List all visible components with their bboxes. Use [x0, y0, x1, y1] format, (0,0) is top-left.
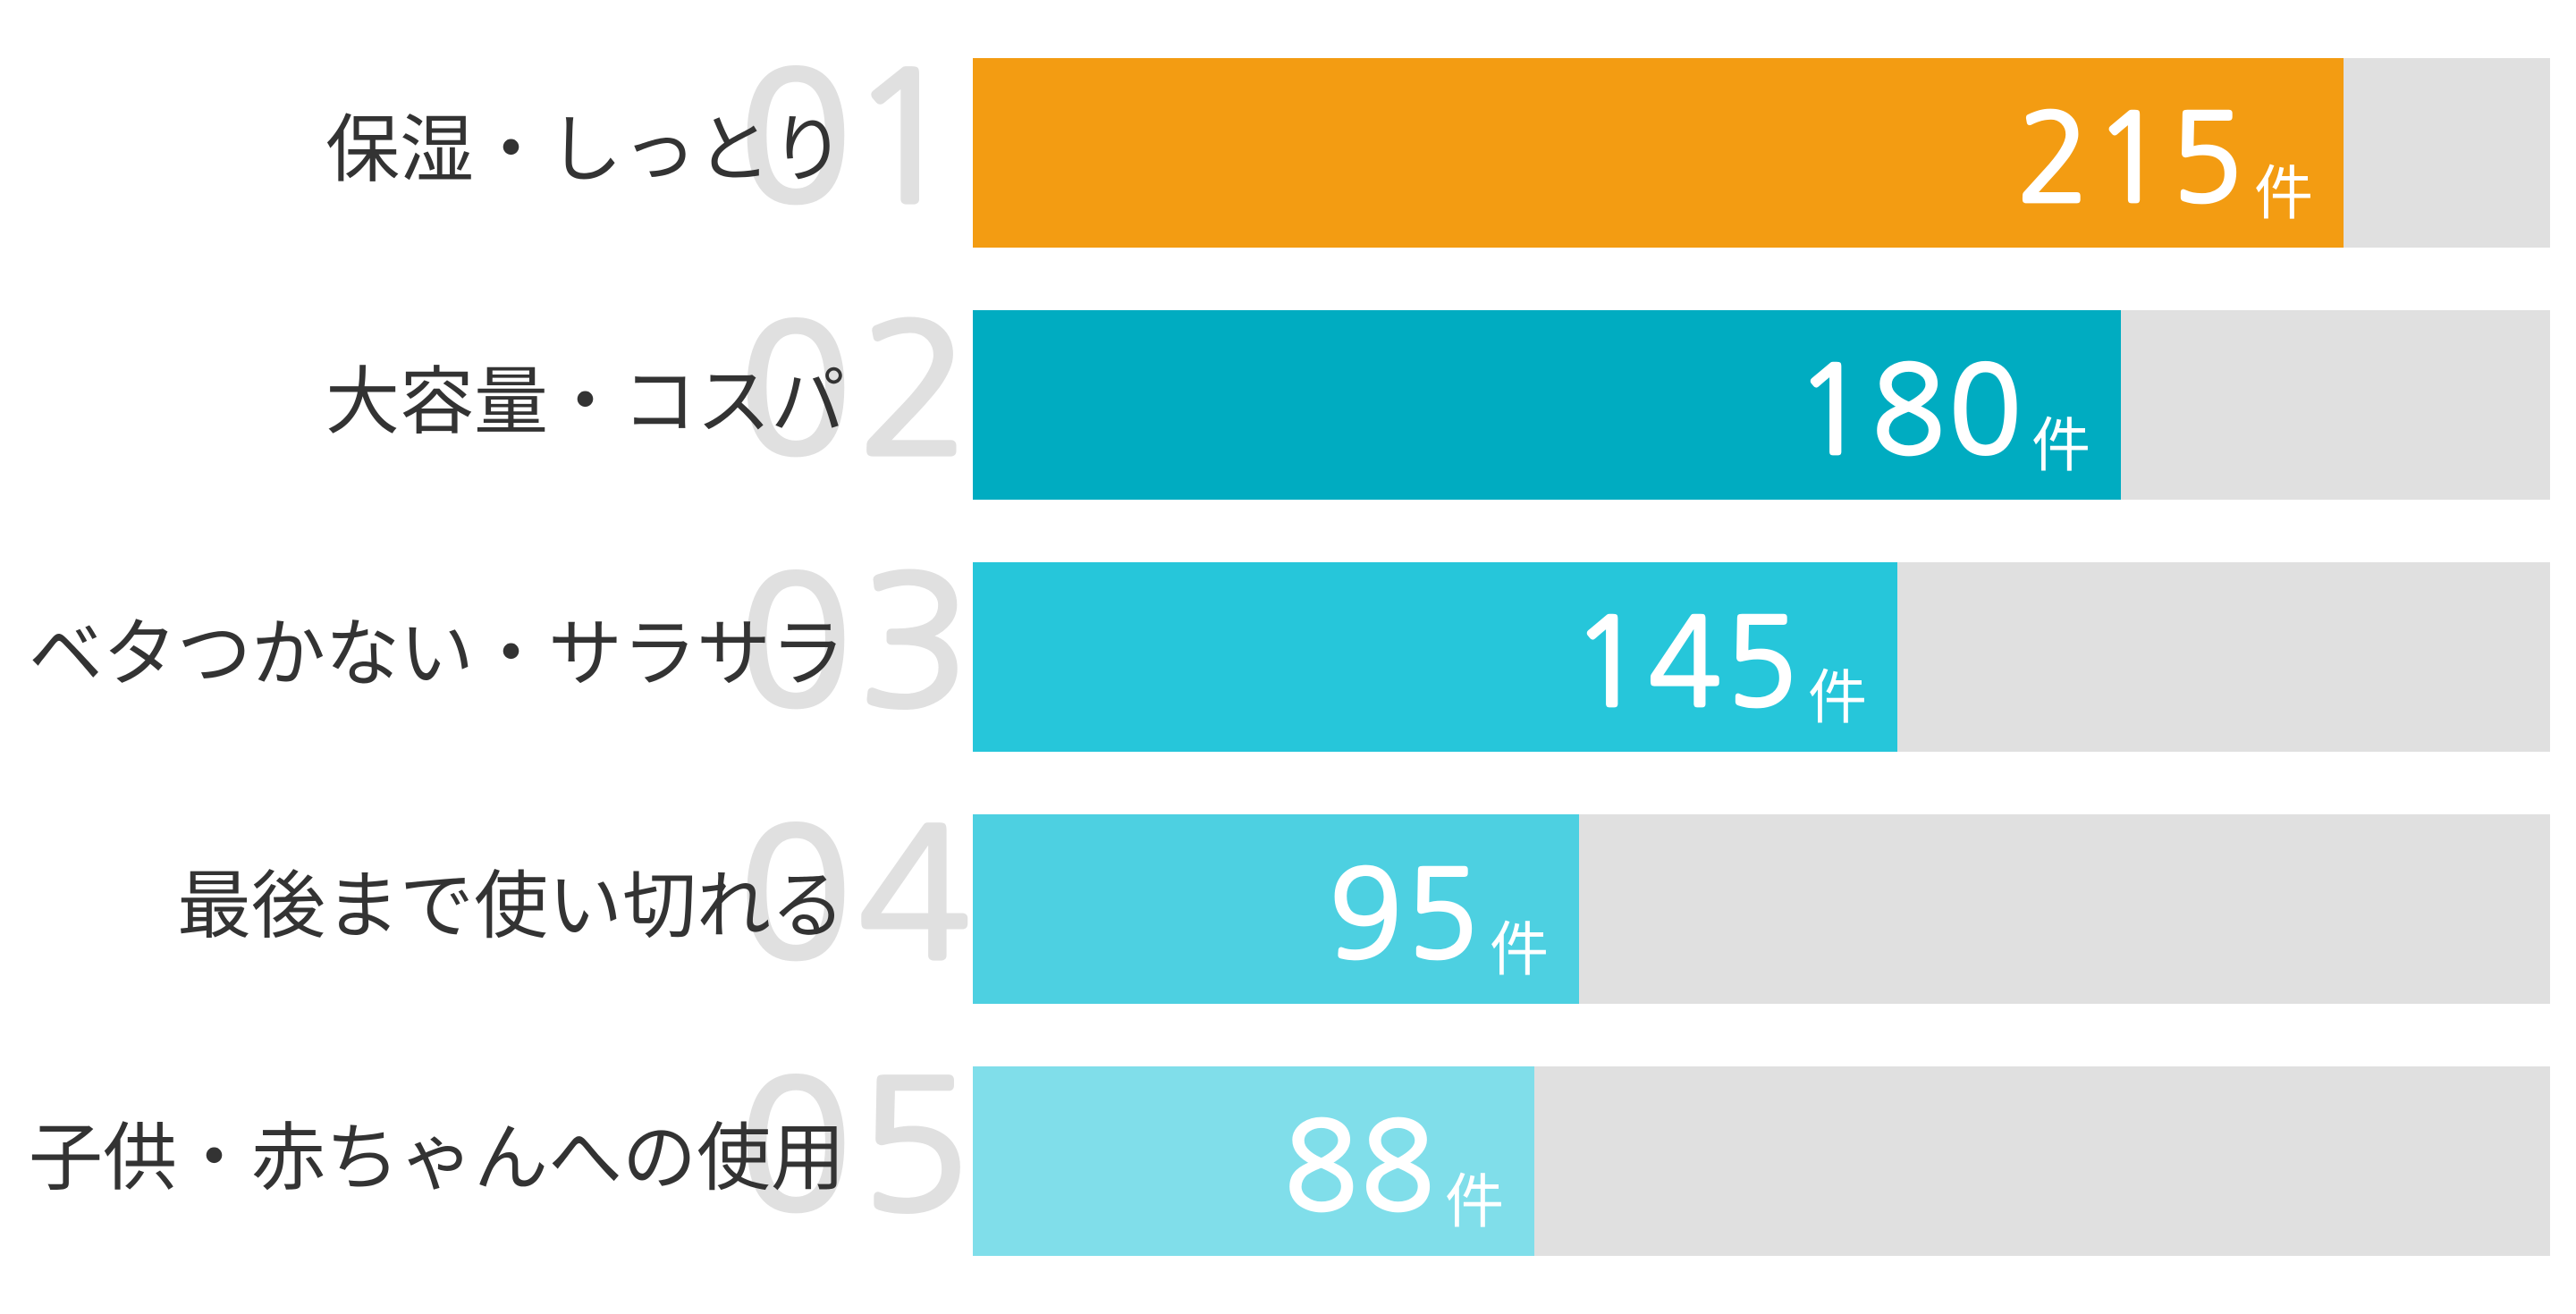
bar: 180 — [973, 310, 2121, 500]
bar: 88 — [973, 1066, 1534, 1256]
value 88件: 件 — [1445, 1168, 1504, 1234]
track — [973, 1066, 2550, 1256]
value 88件: 88 — [1284, 1107, 1438, 1227]
label: ベタつかない・サラサラ — [29, 612, 845, 695]
rank number 05: 05 — [739, 1057, 971, 1235]
rank number 02: 02 — [739, 301, 971, 479]
value 145件: 145 — [1572, 602, 1802, 723]
track — [973, 310, 2550, 500]
label: 子供・赤ちゃんへの使用 — [29, 1116, 845, 1200]
value 215件: 件 — [2254, 160, 2313, 226]
value 180件: 180 — [1795, 350, 2025, 471]
value 88件 — [1284, 1107, 1504, 1234]
value 95件 — [1329, 855, 1549, 982]
bar: 95 — [973, 814, 1579, 1004]
row 1 — [325, 49, 2550, 248]
row 2 — [325, 301, 2550, 500]
value 180件: 件 — [2031, 412, 2090, 478]
bar: 215 — [973, 58, 2344, 248]
track — [973, 814, 2550, 1004]
label: 保湿・しっとり — [325, 108, 845, 191]
value 215件: 215 — [2017, 98, 2247, 219]
row 5 — [29, 1057, 2550, 1256]
rank number 03: 03 — [739, 553, 971, 731]
value 145件: 件 — [1808, 664, 1867, 730]
row 3 — [29, 553, 2550, 752]
rank number 04: 04 — [739, 805, 971, 983]
rank number 01: 01 — [739, 49, 960, 227]
row 4 — [177, 805, 2550, 1004]
value 95件: 件 — [1490, 916, 1549, 982]
label: 最後まで使い切れる — [177, 864, 845, 948]
track — [973, 562, 2550, 752]
value 95件: 95 — [1329, 855, 1482, 975]
label: 大容量・コスパ — [325, 360, 845, 443]
bar: 145 — [973, 562, 1897, 752]
track — [973, 58, 2550, 248]
